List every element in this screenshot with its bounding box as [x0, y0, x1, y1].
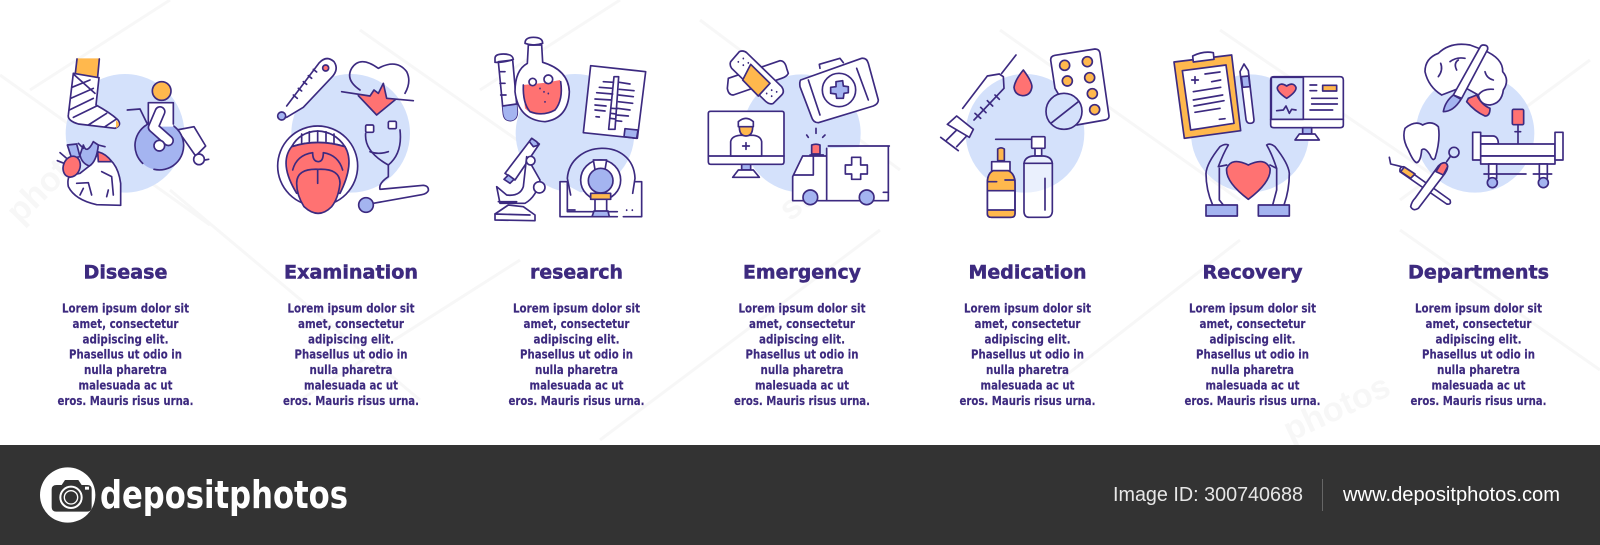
text block: research: Lorem ipsum dolor sit: [513, 300, 640, 316]
icon: thermometer: [278, 58, 336, 120]
icon: heart with pulse: [342, 62, 413, 115]
panel: departments: [1389, 44, 1563, 408]
text: stoph: [772, 141, 868, 228]
text block: Departments: Lorem ipsum dolor sit: [1415, 300, 1542, 316]
text block: Departments: adipiscing elit.: [1436, 331, 1522, 346]
panel: recovery: [1174, 52, 1343, 408]
icon: first aid kit: [800, 58, 878, 123]
text block: Departments: Phasellus ut odio in: [1422, 347, 1535, 362]
text block: Examination: Phasellus ut odio in: [294, 347, 408, 362]
text block: research: eros. Mauris risus urna.: [508, 393, 644, 408]
text block: Emergency: eros. Mauris risus urna.: [734, 393, 870, 408]
text block: Emergency: malesuada ac ut: [755, 378, 849, 392]
icon: doctor on monitor: [708, 111, 784, 177]
icon: clipboard: [1174, 52, 1241, 138]
text block: Recovery: eros. Mauris risus urna.: [1184, 393, 1320, 408]
icon: blister pack: [1051, 49, 1109, 125]
panel: examination: [278, 58, 428, 408]
icon: MRI scanner: [560, 148, 642, 217]
text block: Recovery: nulla pharetra: [1211, 362, 1294, 377]
text block: Emergency: nulla pharetra: [760, 362, 844, 377]
icon: human heart: [57, 142, 121, 205]
heading: Emergency: Emergency: [743, 262, 862, 284]
heading: Medication: Medication: [968, 262, 1086, 284]
text block: Medication: amet, consectetur: [974, 316, 1081, 331]
icon: dropper bottle: [987, 148, 1015, 217]
text block: Examination: adipiscing elit.: [308, 331, 394, 346]
text block: Recovery: amet, consectetur: [1200, 316, 1306, 331]
heading: research: research: [530, 262, 623, 284]
text block: research: adipiscing elit.: [534, 331, 620, 346]
recovery icons: [1174, 52, 1343, 216]
icon: syringe: [941, 55, 1016, 151]
panel: research: [495, 37, 646, 408]
icon: monitor with heart: [1271, 77, 1343, 140]
text block: Medication: nulla pharetra: [986, 362, 1069, 377]
text block: Emergency: [734, 300, 870, 408]
icon: microscope: [495, 138, 545, 221]
icon: hospital bed with drip: [1473, 109, 1563, 188]
text block: Medication: malesuada ac ut: [980, 378, 1075, 392]
text block: Recovery: malesuada ac ut: [1206, 378, 1300, 392]
text block: Examination: eros. Mauris risus urna.: [283, 393, 419, 408]
text block: Recovery: Phasellus ut odio in: [1196, 347, 1309, 362]
panel: emergency: [708, 51, 889, 408]
icon: spray bottle: [996, 137, 1052, 217]
text block: Examination: [283, 300, 419, 408]
icon: pen: [1240, 64, 1254, 123]
icon: stethoscope: [359, 121, 428, 212]
text block: Disease: amet, consectetur: [72, 316, 179, 331]
text: photos: [0, 124, 106, 231]
logo wordmark: depositphotos: [100, 473, 348, 517]
text block: Departments: malesuada ac ut: [1432, 378, 1526, 392]
panel: disease: [57, 58, 209, 408]
text block: Examination: nulla pharetra: [310, 362, 392, 377]
icon: hands holding heart: [1206, 144, 1289, 216]
text block: research: [508, 300, 644, 408]
examination icons: [278, 58, 428, 213]
heading: Disease: Disease: [84, 262, 168, 284]
text block: Disease: Phasellus ut odio in: [69, 347, 182, 362]
text block: Departments: eros. Mauris risus urna.: [1410, 393, 1546, 408]
icon: round flask: [515, 37, 569, 122]
icon: tooth: [1404, 123, 1439, 163]
text block: Examination: malesuada ac ut: [304, 378, 398, 392]
text block: Medication: eros. Mauris risus urna.: [960, 393, 1096, 408]
text block: research: malesuada ac ut: [530, 378, 624, 392]
text block: Medication: adipiscing elit.: [984, 331, 1070, 346]
disease icons: [57, 58, 209, 205]
text block: Disease: eros. Mauris risus urna.: [58, 393, 194, 408]
medication icons: [941, 49, 1109, 217]
icon: crossed bandages: [727, 51, 788, 104]
text block: Disease: nulla pharetra: [84, 362, 167, 377]
text block: Emergency: Phasellus ut odio in: [746, 347, 858, 362]
icon: dental tools: [1389, 147, 1459, 210]
text block: Examination: Lorem ipsum dolor sit: [288, 300, 415, 316]
text block: Recovery: adipiscing elit.: [1210, 331, 1296, 346]
footer bar: [0, 445, 1600, 545]
heading: Departments: Departments: [1408, 262, 1549, 284]
text block: Medication: [960, 300, 1096, 408]
text block: Recovery: [1184, 300, 1320, 408]
text block: Departments: amet, consectetur: [1426, 316, 1532, 331]
icon: camera logo: [40, 467, 95, 523]
text block: Examination: amet, consectetur: [298, 316, 405, 331]
research icons: [495, 37, 646, 221]
text block: Medication: Phasellus ut odio in: [971, 347, 1084, 362]
text block: Disease: adipiscing elit.: [82, 331, 168, 346]
icon: round pill: [1046, 93, 1082, 129]
text block: research: Phasellus ut odio in: [520, 347, 633, 362]
heading: Recovery: Recovery: [1202, 262, 1303, 284]
departments icons: [1389, 44, 1563, 210]
text block: Disease: [58, 300, 194, 408]
image id: Image ID: 300740688: [1113, 484, 1303, 506]
text block: Emergency: amet, consectetur: [749, 316, 856, 331]
text block: Disease: malesuada ac ut: [78, 378, 173, 392]
text block: Emergency: adipiscing elit.: [759, 331, 845, 346]
heading: Examination: Examination: [284, 262, 418, 284]
website url: www.depositphotos.com: [1342, 484, 1560, 506]
text block: Medication: Lorem ipsum dolor sit: [964, 300, 1091, 316]
text block: Recovery: Lorem ipsum dolor sit: [1189, 300, 1316, 316]
text block: Emergency: Lorem ipsum dolor sit: [738, 300, 866, 316]
icon: brain and scalpel: [1425, 44, 1507, 116]
text block: Disease: Lorem ipsum dolor sit: [62, 300, 189, 316]
icon: x-ray sheet: [583, 66, 646, 138]
text block: Departments: nulla pharetra: [1437, 362, 1520, 377]
panel: medication: [941, 49, 1109, 408]
text block: Departments: [1410, 300, 1546, 408]
icon: open mouth and tongue: [278, 126, 358, 213]
icon: blood drop: [1014, 70, 1032, 96]
text block: research: nulla pharetra: [535, 362, 618, 377]
icon: patient in wheelchair: [127, 82, 209, 170]
icon: broken leg in cast: [68, 58, 120, 128]
emergency icons: [708, 51, 889, 205]
text: photos: [1277, 367, 1396, 449]
icon: test tube: [495, 54, 517, 121]
text block: research: amet, consectetur: [524, 316, 630, 331]
icon: ambulance: [793, 128, 889, 205]
